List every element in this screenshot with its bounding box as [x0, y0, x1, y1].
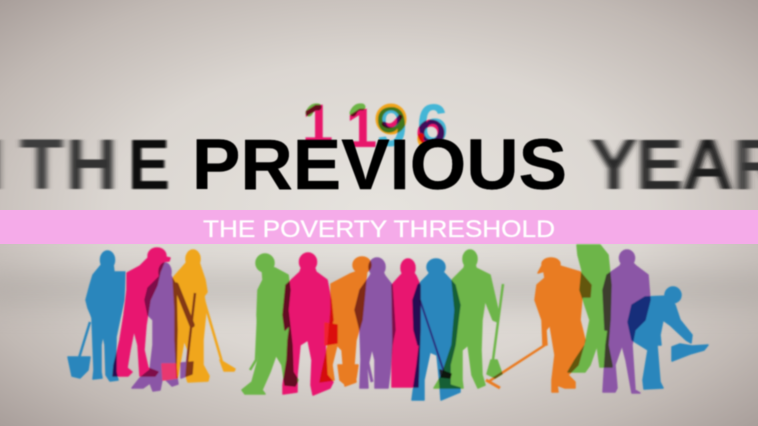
worker: orange bending with rake — [486, 258, 591, 392]
soft shadow band behind figures — [0, 272, 758, 306]
worker: orange with shovel — [320, 257, 371, 386]
digit 1: 1 — [302, 92, 333, 155]
banner text: THE POVERTY THRESHOLD — [203, 216, 555, 243]
worker: purple with broom and shovel — [132, 263, 195, 391]
blurred right word: Y — [590, 126, 637, 205]
workers silhouettes group — [68, 245, 708, 400]
worker: pink standing — [392, 259, 420, 387]
worker: blue with shovel — [68, 251, 125, 381]
blurred left words — [0, 126, 170, 205]
digit 9: 9 — [376, 95, 407, 158]
worker: purple standing — [603, 250, 650, 393]
blurred left words: H — [66, 126, 117, 205]
worker: blue bending with tool — [628, 287, 708, 389]
pink banner — [0, 210, 758, 244]
worker: yellow with broom — [173, 250, 235, 382]
headline: in the previous year — [0, 126, 758, 205]
worker: blue with cap and broom — [412, 259, 460, 400]
blurred left words: T — [20, 126, 63, 205]
worker: purple with broom — [355, 258, 395, 388]
sharp central word: PREVIOUS — [192, 126, 567, 205]
blurred right word — [590, 126, 758, 205]
worker: green back view — [568, 245, 612, 372]
blurred right word: E — [636, 126, 683, 205]
worker: green facing left — [242, 254, 298, 394]
blurred right word: A — [682, 126, 733, 205]
digit 1: 1 — [346, 96, 377, 159]
digit 6: 6 — [417, 92, 448, 155]
worker: pink with bag — [283, 253, 337, 395]
worker: pink with cap — [113, 248, 170, 376]
worker: green with broom — [434, 250, 503, 388]
blurred left words: E — [128, 126, 170, 205]
year number 1196 — [302, 92, 448, 159]
